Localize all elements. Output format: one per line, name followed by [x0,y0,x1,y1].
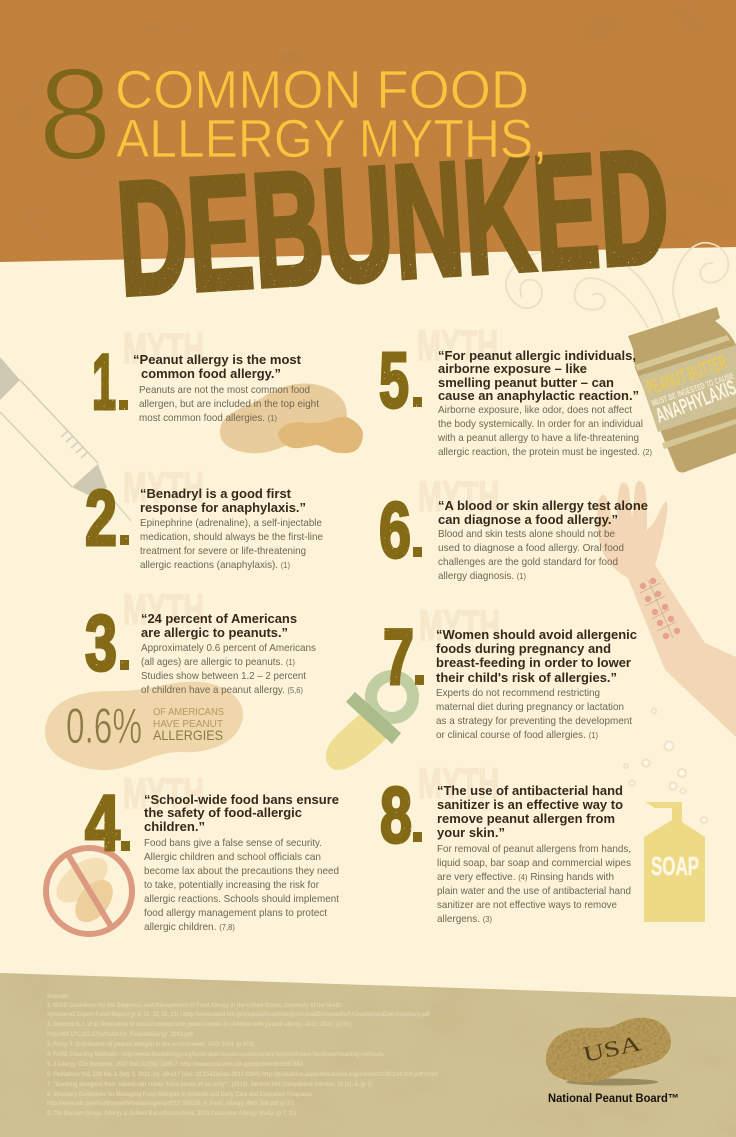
stat label: ALLERGIES [153,727,223,743]
myth 5 heading [438,348,639,403]
sources list: http://www.cdc.gov/healthyyouth/foodallergies/pdf/13_243135_A_Food_Allergy_Web_508.pdf (p 37) [47,1100,294,1107]
myth 3 body: Studies show between 1.2 – 2 percent [141,671,306,682]
myth 6 body [438,529,624,582]
sources list: 2. Simonte S.J, et al. Relevance of casual contact with peanut butter in children with peanut allergy. JACI. 2003. (p191)- [47,1021,353,1028]
myth 4 body: allergic children. (7,8) [144,922,235,933]
myth 3 heading: “24 percent of Americans [141,611,297,626]
myth 3 body: Approximately 0.6 percent of Americans [141,643,316,654]
myth 4 body: Allergic children and school officials can [144,852,321,863]
myth 8 heading: remove peanut allergen from [437,811,615,826]
soap bubbles [624,709,707,823]
myth 4 heading: “School-wide food bans ensure [144,792,339,807]
ghost word: myth: MYTH [419,602,500,650]
myth 7 heading [436,627,637,685]
ghost word: myth: MYTH [123,325,204,373]
myth 7 body: or clinical course of food allergies. (1) [436,730,598,741]
sources list: Sources: [47,993,69,1000]
myth 8 heading: “The use of antibacterial hand [437,783,623,798]
myth 7 body: maternal diet during pregnancy or lactation [436,702,624,713]
stat label [153,707,224,743]
myth 4 body: allergic reactions. Schools should implement [144,894,339,905]
header band [0,0,736,262]
myth 7 body: Experts do not recommend restricting [436,688,600,699]
sources list: 4. FARE Cleaning Methods - http://www.foodallergy.org/tools-and-resources/resources-for/child-care-facilities/cleaning-methods [47,1051,384,1058]
myth 8 body: For removal of peanut allergens from hands, [437,844,631,855]
myth 5 heading: “For peanut allergic individuals, [438,348,636,363]
sources list [47,993,438,1117]
scent swirls [506,243,728,328]
numeral 1: 1 [92,337,116,426]
myth 7 body [436,688,632,741]
myth 5 heading: airborne exposure – like [438,361,587,376]
myth 1 heading: common food allergy.” [141,366,281,381]
stat: 0.6%: 0.6% [66,698,142,754]
sources list: 6. Pediatrics Vol. 129 No. 1 July 1, 2011. pp. e9-e17 (doi: 10.1542/peds.2011-0294) http://pediatrics.aappublications.org/content/126/1/e9.full.pdf+html [47,1071,438,1078]
myth 5 body: Airborne exposure, like odor, does not affect [438,405,632,416]
illustration: peanut butter jar [628,307,736,472]
myth 7 [383,602,637,741]
myth 4 heading: the safety of food-allergic [144,805,302,820]
myth 2 body [140,518,323,571]
myth 2 body: medication, should always be the first-line [140,532,323,543]
myth 4 heading: children.” [144,819,205,834]
sources list: Sponsored Expert Panel Report (p 6, 12, 15, 19, 21) - http://www.niaid.nih.gov/topics/foodAllergy/clinical/Documents/FAGuidelinesExecSummary.pdf [47,1011,431,1018]
myth 6 body: Blood and skin tests alone should not be [438,529,615,540]
myth 1 [92,325,319,426]
myth 3 body [141,643,316,696]
illustration: peanuts by myth 1 [220,384,363,453]
logo wordmark: National Peanut Board™ [548,1092,679,1105]
stat label: HAVE PEANUT [153,718,224,730]
sources list: 1. NIAID Guidelines for the Diagnosis and Management of Food Allergy in the United States: Summary of the NIAID- [47,1002,343,1009]
illustration: pacifier [326,676,413,770]
peanut stamp: USA [581,1030,643,1067]
myth 3 [85,586,316,696]
myth 2 [85,464,323,571]
sources list: 5. J Allergy Clin Immunol. 2007 Dec;117(6): 1265-7. http://www.ncbi.nlm.nih.gov/pubmed/19667884 [47,1061,303,1068]
myth 8 body: are very effective. (4) Rinsing hands with [437,872,614,883]
myth 2 body: Epinephrine (adrenaline), a self-injectable [140,518,322,529]
myth 8 body: liquid soap, bar soap and commercial wipes [437,858,631,869]
ghost word: myth: MYTH [123,770,204,818]
myth 8 heading: sanitizer is an effective way to [437,797,623,812]
myth 1 body [139,385,319,424]
myth 5 body: with a peanut allergy to have a life-threatening [437,433,639,444]
numeral 4: 4 [85,778,120,867]
myth 1 body: most common food allergies. (1) [139,413,277,424]
myth 2 heading [140,486,306,515]
numeral 7: 7 [383,612,414,701]
myth 8 [380,760,631,925]
peanut shell [546,1018,671,1082]
myth 6 body: allergy diagnosis. (1) [438,571,526,582]
ghost word: myth: MYTH [417,322,498,370]
numeral 2: 2 [85,473,117,562]
myth 2 heading: “Benadryl is a good first [140,486,292,501]
myth 5 body: allergic reaction, the protein must be ingested. (2) [438,447,652,458]
myth 5 [379,322,652,458]
illustration: arm with skin test [597,481,736,737]
numeral 3: 3 [85,598,117,687]
myth 4 heading [144,792,339,834]
illustration: 0.6% peanut callout [45,682,243,770]
myth 2 body: allergic reactions (anaphylaxis). (1) [140,560,290,571]
sources list: 3. Perry, T. Distribution of peanut allergen in the environment. JACI 2004. (p 973) [47,1041,254,1048]
myth 7 heading: “Women should avoid allergenic [436,627,637,642]
ghost word: myth: MYTH [123,586,204,634]
myth 6 [379,473,648,582]
myth 1 heading: “Peanut allergy is the most [133,352,302,367]
myth 8 body: sanitizer are not effective ways to remove [437,900,617,911]
illustration: syringe [0,357,131,521]
illustration: no-peanut sign [46,848,132,934]
myth 5 heading: cause an anaphylactic reaction.” [438,388,639,403]
myth 2 heading: response for anaphylaxis.” [140,500,306,515]
myth 8 heading [437,783,623,840]
numeral 8: 8 [380,770,412,859]
illustration: soap bottle [644,802,705,922]
myth 5 body: the body systemically. In order for an individual [438,419,643,430]
myth 4 body [144,838,339,933]
numeral 5: 5 [379,335,409,424]
myth 7 heading: foods during pregnancy and [436,641,611,656]
stat label: OF AMERICANS [153,707,224,718]
numeral 6: 6 [379,485,411,574]
myth 6 body: used to diagnose a food allergy. Oral food [438,543,624,554]
ghost word: myth: MYTH [418,760,499,808]
national peanut board logo [546,1018,679,1105]
myth 4 [85,770,339,933]
myth 3 body: (all ages) are allergic to peanuts. (1) [141,657,295,668]
myth 8 body: allergens. (3) [437,914,492,925]
myth 1 body: Peanuts are not the most common food [139,385,310,396]
myth 6 heading: can diagnose a food allergy.” [438,512,618,527]
myth 1 heading [133,352,302,381]
sources list: 8. Voluntary Guidelines for Managing Food Allergies in Schools and Early Care and Education Programs [47,1091,312,1098]
myth 8 body: plain water and the use of antibacterial hand [437,886,631,897]
myth 5 body [437,405,652,458]
footer band [0,970,736,1137]
title: common food allergy myths [115,60,547,169]
myth 4 body: Food bans give a false sense of security. [144,838,322,849]
myth 6 heading: “A blood or skin allergy test alone [438,498,648,513]
peanut shadow [566,1078,658,1086]
myth 3 body: of children have a peanut allergy. (5,6) [141,685,303,696]
myth 4 body: to take, potentially increasing the risk for [144,880,320,891]
soap label: SOAP [651,851,699,881]
myth 6 heading [438,498,648,527]
skin test dots [640,578,680,639]
ghost word: myth: MYTH [418,473,499,521]
myth 6 body: challenges are the gold standard for food [438,557,618,568]
sources list: http://69.171.215.27/pdfs/OrAir_PeanutAllergy_2003.pdf [47,1031,194,1038]
ghost word: myth: MYTH [123,464,204,512]
myth 3 heading [141,611,297,640]
myth 1 body: allergen, but are included in the top eight [139,399,319,410]
myth 2 body: treatment for severe or life-threatening [140,546,306,557]
myth 5 heading: smelling peanut butter – can [438,375,614,390]
myth 8 body [437,844,631,925]
myth 4 body: food allergy management plans to protect [144,908,327,919]
myth 7 body: as a strategy for preventing the development [436,716,632,727]
title: 8: 8 [38,40,112,187]
myth 7 heading: their child's risk of allergies.” [436,670,617,685]
myth 8 heading: your skin.” [437,825,505,840]
myth 3 heading: are allergic to peanuts.” [141,625,288,640]
sources list: 9. The Bantam Group. Allergy & School Bans/Restrictions. 2013 Consumer Allergy Study. (p 7, 11) [47,1110,296,1117]
myth 4 body: become lax about the precautions they need [144,866,339,877]
myth 7 heading: breast-feeding in order to lower [436,655,631,670]
title: common food allergy myths: COMMON FOOD [115,60,529,120]
sources list: 7. "Banning allergens from school can create 'false sense of security'". (2012). Section 504 Compliance Advisor, 15 (2), 4. (p 7) [47,1081,372,1088]
title: common food allergy myths: ALLERGY MYTHS, [116,109,547,169]
